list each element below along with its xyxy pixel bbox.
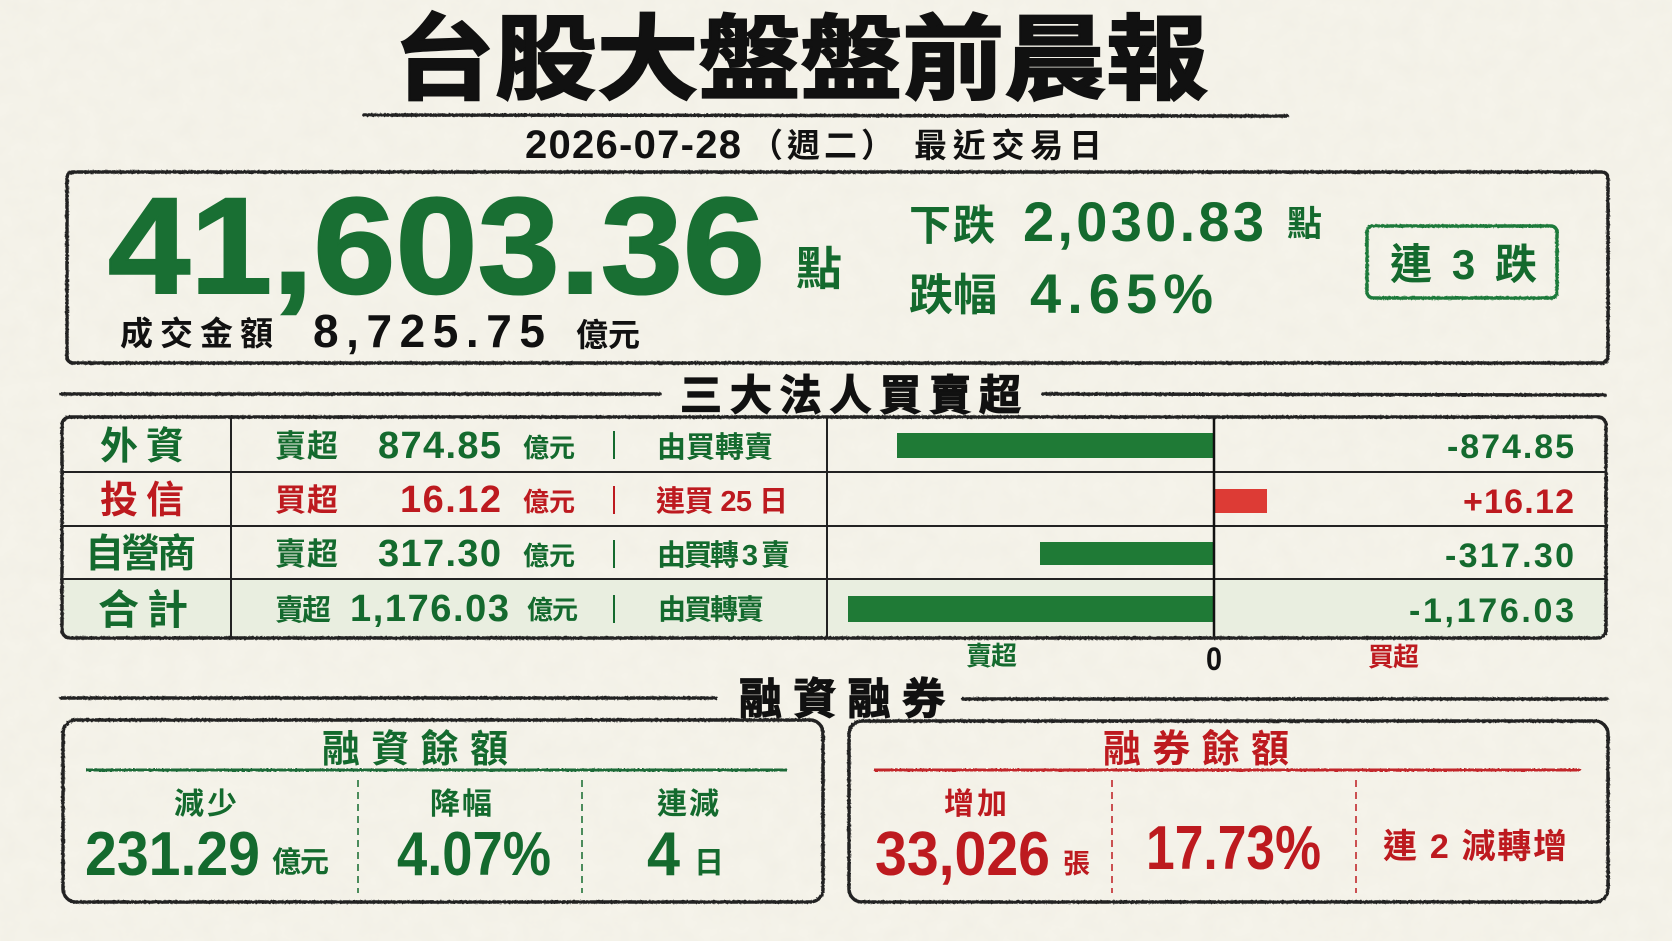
stat: percent: [397, 788, 551, 889]
index change percent: 跌幅: [909, 271, 997, 320]
row: dealers: 自營商: [85, 533, 196, 576]
row: total: 合計: [98, 587, 188, 633]
index change percent: 4.65%: [1030, 262, 1213, 325]
stat: decrease: 231.29: [85, 820, 260, 889]
row: total: [98, 587, 1574, 633]
row: investment trust: 連買 25 日: [656, 485, 788, 518]
table border: [62, 417, 1606, 638]
panel: margin balance: [63, 720, 823, 902]
stat: percent: 17.73%: [1146, 814, 1321, 883]
panel: short balance: [849, 721, 1608, 902]
row: foreign investors: 外資: [100, 426, 184, 468]
turnover: 成交金額: [120, 315, 273, 352]
stat: streak: 日: [694, 847, 724, 880]
stat: increase: [875, 788, 1090, 889]
date subtitle: [525, 123, 1102, 167]
row: total: 賣超: [275, 594, 331, 627]
row: foreign investors: 由買轉賣: [657, 431, 773, 464]
index change points: 下跌: [909, 202, 995, 249]
row: total: 1,176.03: [350, 588, 509, 630]
axis labels: 0: [1206, 641, 1222, 677]
panel: index summary: [67, 170, 1608, 363]
row: foreign investors: [100, 425, 1574, 468]
stat: streak: 連減: [657, 788, 719, 821]
stat: increase: 張: [1063, 849, 1090, 879]
row: dealers: 億元: [523, 541, 575, 571]
index change percent: [909, 262, 1213, 325]
row: foreign investors: 賣超: [275, 429, 338, 464]
section heading: margin trading: 融資融券: [739, 676, 945, 724]
stat: decrease: [85, 788, 329, 889]
stat: increase: 增加: [944, 788, 1007, 821]
axis labels: [966, 641, 1419, 677]
index change points: [909, 190, 1322, 253]
row: total: 由買轉賣: [658, 594, 764, 625]
date subtitle: 最近交易日: [914, 127, 1102, 164]
row: total: 億元: [527, 595, 578, 625]
stat: streak: [647, 788, 724, 889]
index change points: 點: [1287, 205, 1322, 244]
row: dealers: 賣超: [275, 537, 338, 572]
row: foreign investors: -874.85: [1447, 428, 1574, 466]
total row highlight: [62, 579, 1606, 638]
row: investment trust: 億元: [523, 487, 575, 517]
turnover: [120, 305, 640, 357]
stat: percent: 4.07%: [397, 820, 551, 889]
streak badge: [1367, 226, 1557, 298]
row: dealers: [85, 533, 1574, 576]
index change points: 2,030.83: [1023, 190, 1264, 253]
row: investment trust: 16.12: [400, 479, 501, 521]
stat: increase: 33,026: [875, 820, 1050, 889]
row: investment trust: 買超: [275, 483, 338, 518]
row: dealers: -317.30: [1445, 537, 1574, 575]
row: investment trust: [100, 479, 1574, 522]
date subtitle: （週二）: [750, 127, 894, 164]
title: 台股大盤盤前晨報: [393, 8, 1208, 112]
panel heading: 融券餘額: [1103, 729, 1289, 771]
stat: percent: 降幅: [430, 788, 492, 821]
row: investment trust: 投信: [100, 480, 184, 522]
row: investment trust: +16.12: [1463, 483, 1574, 521]
axis labels: 賣超: [966, 641, 1017, 671]
title underline: [364, 115, 1287, 116]
stat: streak: 連 2 減轉增: [1383, 828, 1567, 866]
turnover: 8,725.75: [313, 305, 545, 357]
index unit: 點: [796, 243, 842, 295]
row: total: -1,176.03: [1409, 592, 1574, 630]
row: foreign investors: 億元: [523, 433, 575, 463]
zero axis: [1213, 417, 1215, 638]
row: foreign investors: 874.85: [378, 425, 501, 467]
streak badge: 連 3 跌: [1390, 241, 1537, 288]
row: dealers: 由買轉 3 賣: [657, 539, 790, 572]
date subtitle: 2026-07-28: [525, 123, 741, 167]
stat: decrease: 億元: [272, 846, 329, 879]
turnover: 億元: [576, 317, 640, 353]
panel: institutional table: [62, 417, 1606, 638]
row: dealers: 317.30: [378, 533, 501, 575]
stat: streak: 4: [647, 820, 680, 889]
panel heading: 融資餘額: [322, 729, 508, 771]
section heading: institutional investors: 三大法人買賣超: [680, 372, 1021, 419]
stat: decrease: 減少: [174, 788, 237, 821]
index value: 41,603.36: [108, 170, 765, 323]
axis labels: 買超: [1368, 642, 1419, 672]
